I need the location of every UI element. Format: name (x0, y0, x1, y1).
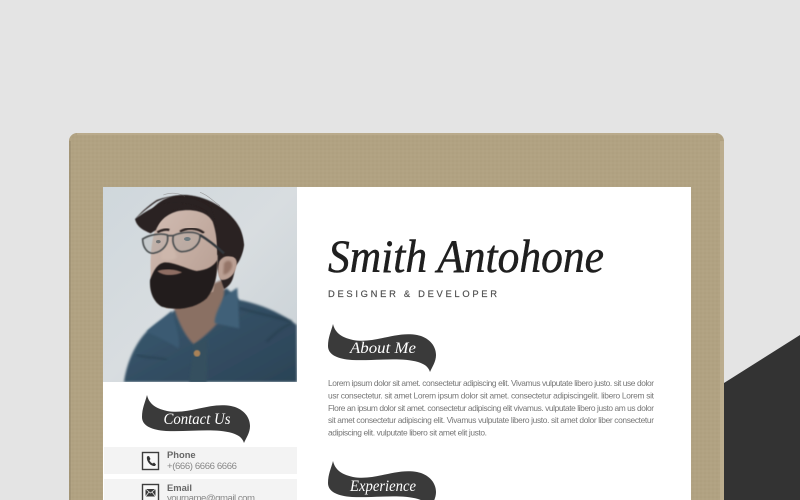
neck (173, 278, 225, 344)
eyebrows (157, 229, 204, 233)
glasses (143, 232, 224, 253)
contact row: phone: Phone (167, 449, 196, 460)
about me text block: Flore an ipsum dolor sit amet. consectetur adipiscing elit vivamus. vulputate libero justo am us dolor (328, 403, 654, 413)
lips (157, 269, 182, 275)
tan board (69, 133, 724, 500)
job title: DESIGNER & DEVELOPER (328, 288, 497, 299)
flyaway hairs (163, 192, 220, 206)
collar (147, 311, 179, 348)
banner: experience (328, 461, 436, 500)
banner: contact us: Contact Us (164, 411, 230, 428)
icon: phone (142, 452, 158, 470)
about me text block: sit amet consectetur adipiscing elit. Vivamus vulputate libero justo. sit amet dolor liber consectetur (328, 415, 654, 425)
banner: contact us (142, 395, 250, 443)
beard (150, 260, 217, 309)
resume sheet (103, 187, 691, 500)
banner: about me (328, 324, 436, 372)
portrait photo (103, 187, 297, 382)
nose (174, 256, 175, 257)
about me text block: adipiscing elit. vulputate libero sit amet elit justo. (328, 428, 487, 438)
about me text block: usr consectetur. sit amet Lorem ipsum dolor sit amet. consectetur adipiscingelit. libero Lorem sit (328, 390, 655, 400)
dark corner shape (724, 335, 800, 500)
ear (218, 256, 237, 280)
contact row: email: Email (167, 482, 192, 493)
banner: about me: About Me (349, 340, 416, 357)
face (151, 210, 218, 308)
contact row: phone (104, 447, 297, 474)
shirt (124, 288, 297, 382)
name heading: Smith Antohone (328, 231, 604, 283)
contact row: email (104, 479, 297, 500)
about me text block (328, 378, 655, 438)
icon: envelope (142, 484, 158, 500)
about me text block: Lorem ipsum dolor sit amet. consectetur adipiscing elit. Vivamus vulputate libero justo. sit use dolor (328, 378, 654, 388)
banner: experience: Experience (349, 478, 416, 495)
contact row: phone: +(666) 6666 6666 (167, 461, 237, 472)
back hair (150, 195, 243, 289)
front hair (135, 196, 244, 258)
